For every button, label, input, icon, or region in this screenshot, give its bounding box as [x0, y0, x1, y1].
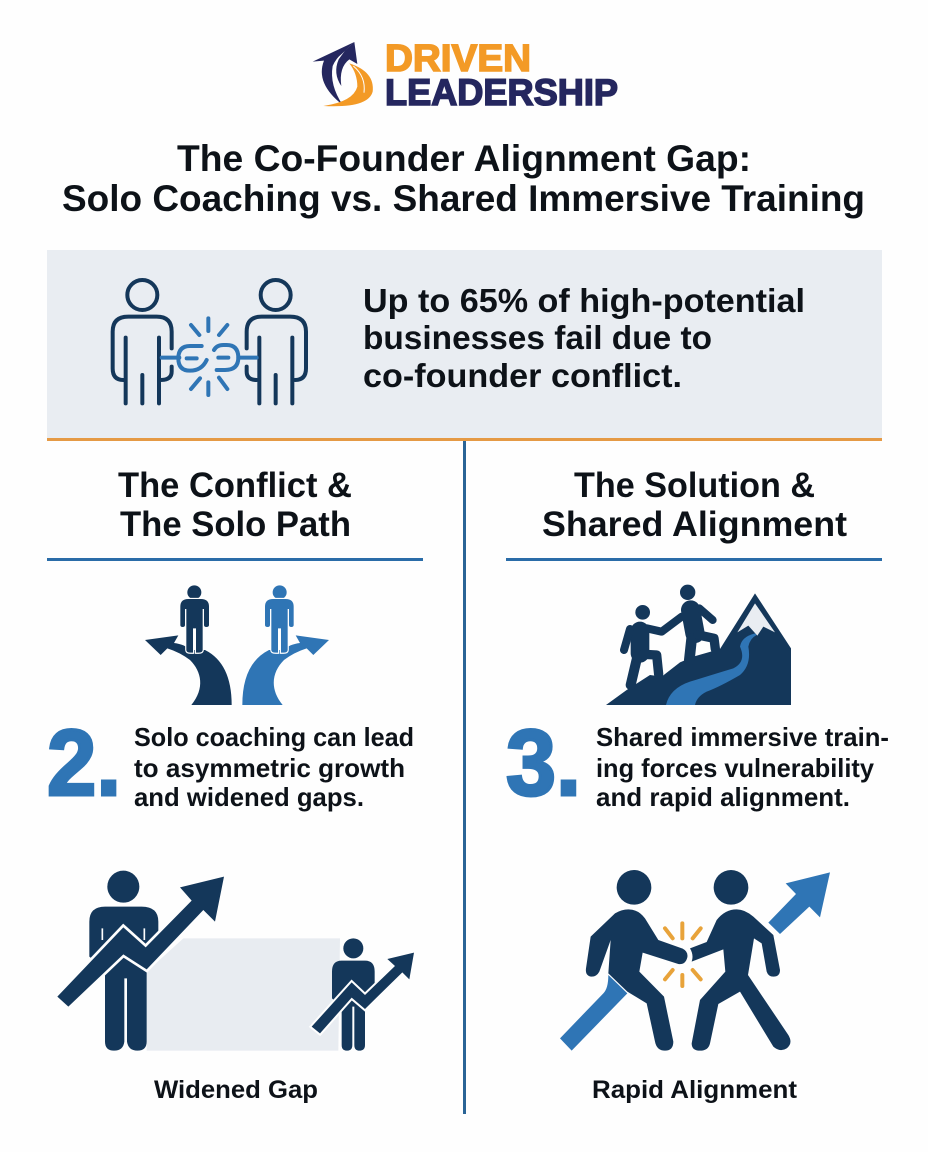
text: solo coaching: and widened gaps.	[134, 782, 364, 812]
icon: widened gap between large and small figures	[57, 871, 414, 1051]
large figure with arrow	[57, 871, 224, 1051]
stat text: businesses fail due to	[363, 319, 712, 356]
stat text: Up to 65% of high-potential	[363, 282, 805, 319]
handshake sparks	[665, 923, 701, 986]
logo: Driven Leadership	[313, 38, 618, 113]
rising arrow	[560, 872, 830, 1051]
icon: two climbers helping on a mountain	[606, 585, 791, 705]
text: shared immersive training	[596, 722, 889, 812]
small figure with arrow	[312, 938, 414, 1051]
heading: solution and shared alignment	[542, 466, 847, 544]
text: solo coaching	[134, 722, 414, 812]
heading: conflict and solo path: The Conflict &	[118, 466, 352, 505]
title	[62, 138, 865, 219]
panel: shared alignment	[506, 466, 889, 1104]
logo wordmark: Leadership: LEADERSHIP	[385, 72, 618, 113]
text: shared immersive training: Shared immersive train-	[596, 722, 889, 752]
text: shared immersive training: and rapid alignment.	[596, 782, 850, 812]
stat text	[363, 282, 805, 394]
text: shared immersive training: ing forces vulnerability	[596, 753, 875, 783]
heading: conflict and solo path	[118, 466, 352, 544]
panel: statistic banner	[47, 250, 882, 441]
panel: the solo path	[47, 466, 423, 1104]
heading: conflict and solo path: The Solo Path	[120, 505, 351, 544]
icon: two people on diverging roads	[145, 585, 329, 705]
text: solo coaching: Solo coaching can lead	[134, 722, 414, 752]
stat text: co-founder conflict.	[363, 357, 682, 394]
text: solo coaching: to asymmetric growth	[134, 753, 405, 783]
icon: handshake with rising arrow	[560, 870, 830, 1051]
heading: solution and shared alignment: Shared Alignment	[542, 505, 847, 544]
caption: widened gap: Widened Gap	[154, 1076, 318, 1104]
heading: solution and shared alignment: The Solution &	[574, 466, 815, 505]
title: The Co-Founder Alignment Gap:	[177, 138, 751, 179]
icon: logo arrow and road	[313, 42, 373, 106]
right figure	[690, 870, 790, 1051]
logo wordmark: Driven: DRIVEN	[385, 38, 531, 80]
left figure	[586, 870, 790, 1051]
number 2: 2.	[47, 710, 121, 815]
caption: rapid alignment: Rapid Alignment	[592, 1076, 798, 1104]
gap block	[147, 938, 340, 1051]
title: Solo Coaching vs. Shared Immersive Training	[62, 178, 865, 219]
number 3: 3.	[506, 710, 581, 815]
icon: two founders with a broken chain link	[113, 280, 306, 403]
